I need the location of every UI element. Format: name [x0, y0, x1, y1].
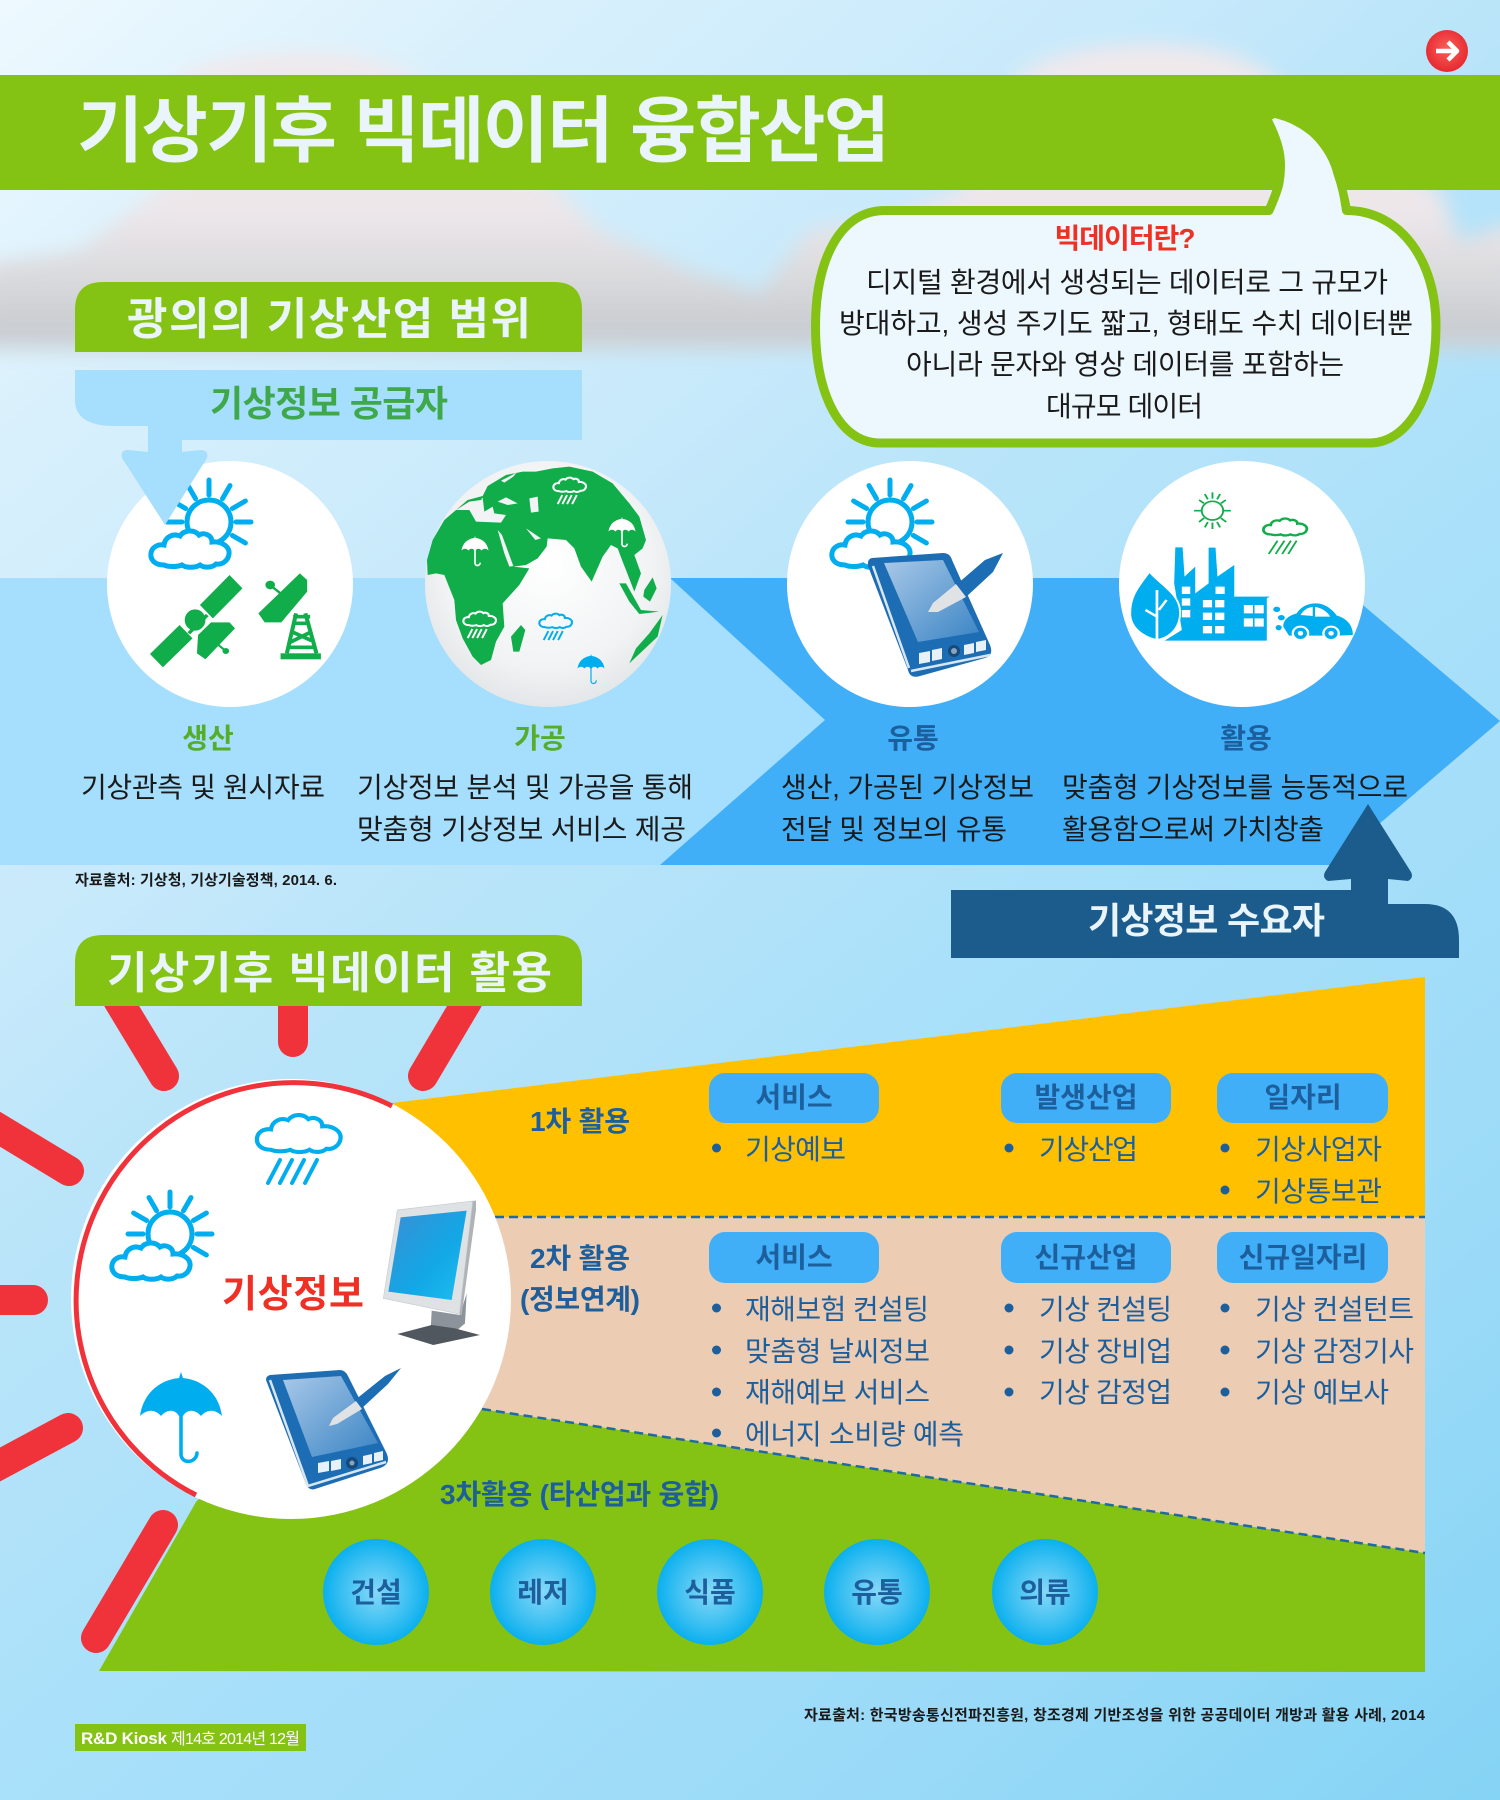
- heading: broad weather industry scope: 광의의 기상산업 범위: [127, 295, 531, 344]
- tier 2 column: new jobs: 기상 감정기사: [1255, 1336, 1414, 1367]
- icon: radar dish tower: [258, 573, 321, 659]
- hub label: 기상정보: [222, 1274, 364, 1316]
- tier 1 column: jobs: 기상사업자: [1255, 1134, 1382, 1165]
- stage text: distribution: [781, 723, 1034, 845]
- tier 1 column: jobs: [1217, 1073, 1388, 1207]
- callout text: 디지털 환경에서 생성되는 데이터로 그 규모가: [866, 267, 1388, 298]
- stage text: processing: [357, 723, 693, 845]
- arrow: weather information consumers: 기상정보 수요자: [1088, 900, 1325, 941]
- source note 1: 자료출처: 기상청, 기상기술정책, 2014. 6.: [75, 872, 337, 889]
- tier 2 column: new jobs: [1217, 1232, 1414, 1408]
- icon: tablet with stylus: [868, 553, 1003, 677]
- label: tier 3: 3차활용 (타산업과 융합): [440, 1479, 719, 1510]
- circle: processing globe: [425, 461, 671, 707]
- circle: leisure: [490, 1539, 596, 1645]
- tier 2 column: new industry: 기상 감정업: [1039, 1377, 1172, 1408]
- label: tier 2: [520, 1243, 640, 1315]
- icon: white umbrella west: [461, 536, 489, 565]
- icon: red arrow button: [1426, 30, 1468, 72]
- icon: green rain cloud: [1263, 519, 1307, 554]
- icon: sun and cloud: [832, 480, 932, 567]
- circle: construction: [323, 1539, 429, 1645]
- circle: distribution: 유통: [851, 1577, 903, 1608]
- tier 2 column: new industry: 기상 컨설팅: [1039, 1294, 1172, 1325]
- label: tier 2: (정보연계): [520, 1284, 640, 1315]
- tier 1 column: services: 기상예보: [745, 1134, 846, 1165]
- tier 1 column: services: [709, 1073, 879, 1165]
- stage text: processing: 맞춤형 기상정보 서비스 제공: [357, 814, 686, 845]
- icon: white umbrella east: [608, 517, 636, 546]
- circle: production: [107, 461, 353, 707]
- icon: monitor: [383, 1201, 480, 1345]
- icon: umbrella: [140, 1372, 222, 1461]
- label: tier 2: 2차 활용: [530, 1243, 630, 1274]
- source note 2: 자료출처: 한국방송통신전파진흥원, 창조경제 기반조성을 위한 공공데이터 개방과 활용 사례, 2014: [804, 1707, 1426, 1724]
- tier 2 column: services: [709, 1232, 964, 1450]
- stage text: application: [1062, 723, 1408, 845]
- tier 1 column: originating industry: 발생산업: [1034, 1082, 1138, 1113]
- title banner: [0, 75, 1500, 190]
- tier 2 column: new jobs: 기상 컨설턴트: [1255, 1294, 1414, 1325]
- circle: clothing: 의류: [1019, 1577, 1071, 1608]
- continents: [427, 467, 663, 665]
- icon: sun rays: [0, 1000, 468, 1638]
- tier 1 column: jobs: 기상통보관: [1255, 1176, 1382, 1207]
- tier 1 column: originating industry: 기상산업: [1039, 1134, 1138, 1165]
- stage text: application: 활용: [1220, 723, 1272, 754]
- callout text: 방대하고, 생성 주기도 짧고, 형태도 수치 데이터뿐: [839, 308, 1413, 339]
- heading: big data utilisation: [75, 935, 582, 1006]
- tier 2 column: services: 에너지 소비량 예측: [745, 1419, 964, 1450]
- arrow: weather information suppliers: [75, 370, 582, 525]
- circle: leisure: 레저: [517, 1577, 569, 1608]
- tier 1 column: services: 서비스: [755, 1082, 833, 1113]
- callout text: 아니라 문자와 영상 데이터를 포함하는: [906, 349, 1344, 380]
- stage text: distribution: 유통: [887, 723, 939, 754]
- panel: tier 2 peach wedge: [400, 1217, 1425, 1553]
- callout heading: 빅데이터란?: [1054, 223, 1196, 254]
- publication badge: [75, 1724, 306, 1751]
- label: tier 1: 1차 활용: [530, 1106, 630, 1137]
- callout text: 대규모 데이터: [1046, 391, 1203, 422]
- icon: blue rain cloud: [539, 614, 572, 640]
- icon: sun and cloud: [151, 480, 251, 567]
- publication badge: 제14호 2014년 12월: [171, 1730, 300, 1748]
- callout: what is big data: [816, 112, 1436, 443]
- tier 2 column: services: 맞춤형 날씨정보: [745, 1336, 930, 1367]
- tier 2 column: new jobs: 기상 예보사: [1255, 1377, 1389, 1408]
- stage text: production: [81, 723, 325, 803]
- panel: tier 1 yellow wedge: [392, 977, 1425, 1217]
- tier 2 column: new industry: 기상 장비업: [1039, 1336, 1172, 1367]
- title: 기상기후 빅데이터 융합산업: [77, 92, 890, 172]
- stage text: processing: 가공: [514, 723, 566, 754]
- icon: sun and cloud: [112, 1192, 212, 1279]
- value chain chevrons: [0, 578, 1500, 865]
- callout text: [839, 267, 1413, 422]
- stage text: processing: 기상정보 분석 및 가공을 통해: [357, 772, 693, 803]
- stage text: application: 맞춤형 기상정보를 능동적으로: [1062, 772, 1408, 803]
- tier 1 column: jobs: 일자리: [1264, 1082, 1342, 1113]
- heading: broad weather industry scope: [75, 282, 582, 352]
- circle: application: [1119, 461, 1365, 707]
- tier 2 column: services: 재해보험 컨설팅: [745, 1294, 929, 1325]
- stage text: distribution: 전달 및 정보의 유통: [781, 814, 1007, 845]
- circle: distribution: [824, 1539, 930, 1645]
- panel: tier 3 green wedge: [99, 1395, 1425, 1672]
- circle: distribution: [787, 461, 1033, 707]
- tier 2 column: new industry: [1001, 1232, 1172, 1408]
- icon: white rain cloud north: [553, 478, 586, 504]
- icon: rain cloud: [257, 1115, 341, 1183]
- circle: food: 식품: [684, 1577, 736, 1608]
- tier 2 column: services: 재해예보 서비스: [745, 1377, 930, 1408]
- icon: car: [1283, 603, 1353, 636]
- tier 2 column: new jobs: 신규일자리: [1239, 1242, 1367, 1273]
- icon: leaf: [1130, 572, 1180, 640]
- tier 1 column: originating industry: [1001, 1073, 1171, 1165]
- stage text: production: 기상관측 및 원시자료: [81, 772, 325, 803]
- arrow: weather information consumers: [951, 804, 1459, 958]
- circle: weather information hub: [71, 1079, 511, 1519]
- publication badge: R&D Kiosk: [81, 1729, 168, 1748]
- icon: satellite: [150, 575, 242, 667]
- stage text: distribution: 생산, 가공된 기상정보: [781, 772, 1034, 803]
- icon: factory: [1165, 547, 1270, 641]
- stage text: application: 활용함으로써 가치창출: [1062, 814, 1324, 845]
- stage text: production: 생산: [182, 723, 234, 754]
- tier 2 column: services: 서비스: [755, 1242, 833, 1273]
- circle: clothing: [992, 1539, 1098, 1645]
- icon: tablet with stylus: [266, 1368, 401, 1489]
- arrow: weather information suppliers: 기상정보 공급자: [210, 383, 448, 424]
- circle: food: [657, 1539, 763, 1645]
- circle: construction: 건설: [350, 1577, 402, 1608]
- icon: white rain cloud south: [463, 612, 496, 638]
- tier 2 column: new industry: 신규산업: [1034, 1242, 1138, 1273]
- heading: big data utilisation: 기상기후 빅데이터 활용: [107, 949, 552, 998]
- icon: blue umbrella: [577, 654, 605, 683]
- icon: green sun: [1194, 492, 1231, 529]
